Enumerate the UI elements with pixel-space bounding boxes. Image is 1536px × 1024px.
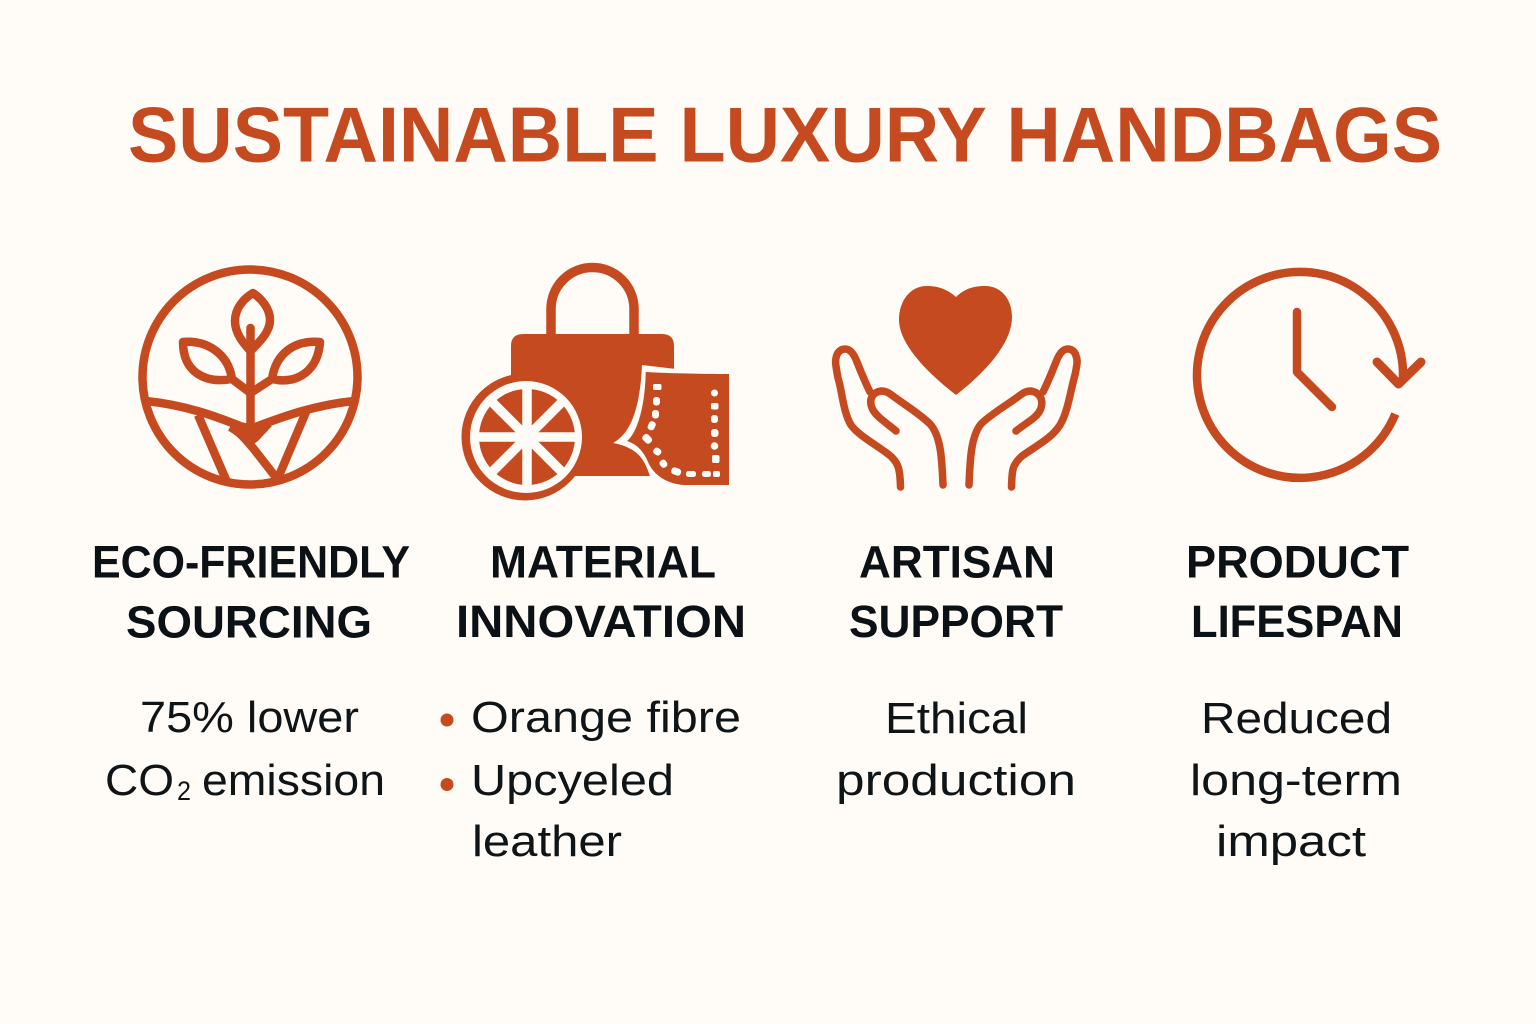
- left hand: [836, 349, 943, 487]
- title: SUSTAINABLE LUXURY HANDBAGS: [128, 90, 1442, 178]
- text: reduced long-term impact: impact: [1216, 817, 1366, 866]
- icon: hands holding heart: [836, 286, 1077, 487]
- text: 75% lower CO2 emission: 75% lower: [140, 693, 359, 742]
- heading: eco-friendly sourcing: SOURCING: [126, 596, 372, 648]
- heart: [899, 286, 1012, 395]
- text: reduced long-term impact: long-term: [1190, 756, 1402, 805]
- bag body: [511, 334, 674, 476]
- text: reduced long-term impact: [1190, 694, 1402, 866]
- heading: artisan support: ARTISAN: [859, 536, 1055, 588]
- heading: eco-friendly sourcing: ECO-FRIENDLY: [92, 536, 410, 588]
- panel: product lifespan: [1186, 272, 1421, 866]
- bullet list: materials: Upcyeled: [471, 756, 674, 805]
- panel: artisan support: [836, 286, 1077, 805]
- patch stitches: [641, 384, 720, 477]
- text: reduced long-term impact: Reduced: [1201, 694, 1392, 743]
- heading: eco-friendly sourcing: [92, 536, 410, 648]
- orange slice: [462, 374, 588, 500]
- bullet list: materials: leather: [472, 817, 622, 866]
- bag handle: [551, 267, 634, 337]
- icon: bag with orange slice and leather patch: [462, 267, 729, 500]
- text: 75% lower CO2 emission: CO: [105, 756, 174, 805]
- text: 75% lower CO2 emission: [105, 693, 385, 806]
- text: ethical production: [836, 694, 1076, 805]
- heading: product lifespan: PRODUCT: [1186, 536, 1409, 588]
- heading: product lifespan: LIFESPAN: [1191, 596, 1403, 647]
- heading: material innovation: INNOVATION: [456, 596, 746, 647]
- heading: material innovation: [456, 536, 746, 647]
- panel: eco-friendly sourcing: [92, 270, 410, 806]
- bullet list: materials: [440, 693, 741, 866]
- text: 75% lower CO2 emission: 2: [177, 776, 191, 806]
- heading: artisan support: SUPPORT: [849, 596, 1063, 647]
- leather patch: [627, 372, 729, 485]
- bullet list: materials: Orange fibre: [471, 693, 741, 742]
- right hand: [969, 349, 1077, 487]
- icon: plant in circle: [142, 270, 358, 484]
- panel: material innovation: [440, 267, 746, 866]
- text: ethical production: production: [836, 756, 1076, 805]
- text: 75% lower CO2 emission: emission: [202, 756, 385, 805]
- heading: artisan support: [849, 536, 1063, 647]
- icon: clock with circular arrow: [1197, 272, 1421, 478]
- text: ethical production: Ethical: [885, 694, 1028, 743]
- heading: material innovation: MATERIAL: [490, 536, 716, 588]
- leather patch cut line: [613, 365, 680, 480]
- heading: product lifespan: [1186, 536, 1409, 647]
